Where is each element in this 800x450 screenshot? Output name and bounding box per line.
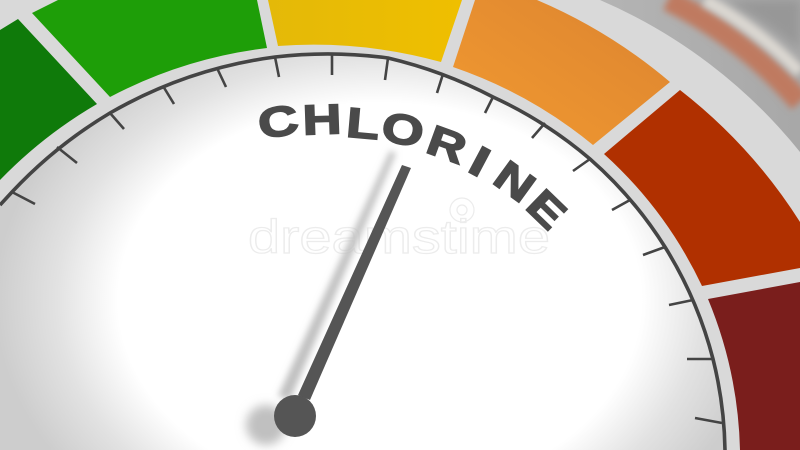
title: CHLORINE (255, 96, 575, 239)
title: CHLORINE: I (462, 137, 498, 186)
watermark: dreamstime (248, 210, 550, 263)
segment: orange (453, 0, 670, 145)
segment: dark green (0, 19, 97, 180)
title: CHLORINE: H (302, 96, 342, 144)
title: CHLORINE: E (517, 181, 575, 239)
title: CHLORINE: C (255, 96, 302, 148)
title: CHLORINE: O (378, 103, 428, 157)
title: CHLORINE: L (344, 99, 381, 149)
dial face (0, 54, 725, 450)
title: CHLORINE: N (485, 152, 543, 212)
segment: yellow (268, 0, 462, 62)
scale with tick marks (0, 54, 725, 450)
segment: red (604, 90, 800, 286)
needle shadow (246, 151, 396, 445)
title: CHLORINE: R (421, 117, 472, 174)
needle (274, 165, 411, 437)
segment: maroon (708, 282, 800, 450)
watermark (248, 198, 550, 263)
blurred background corner (600, 0, 800, 152)
segment: green (32, 0, 267, 97)
